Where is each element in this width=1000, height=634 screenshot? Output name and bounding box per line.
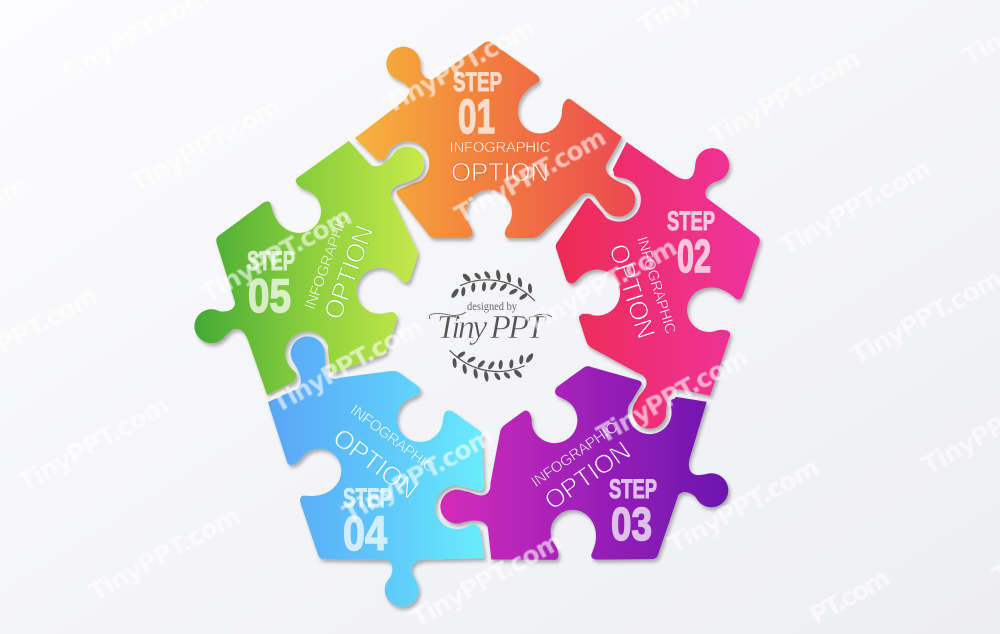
panel: step 01 puzzle piece (355, 42, 635, 238)
watermarks: TinyPPT.com (84, 500, 245, 607)
panel: step 02 puzzle piece (532, 112, 805, 440)
panel: step 04 puzzle piece (201, 312, 543, 634)
step 04 number: 04 (343, 508, 387, 561)
step 02 number: 02 (677, 230, 711, 282)
panel: step 05 puzzle piece (175, 99, 449, 426)
watermarks: TinyPPT.com (592, 342, 753, 449)
step 01 infographic caption: INFOGRAPHIC (450, 139, 551, 156)
step 02 option caption: OPTION (603, 240, 662, 342)
watermarks: TinyPPT.com (450, 122, 611, 229)
step 05 label: STEP (247, 246, 295, 276)
green piece shape (175, 99, 449, 426)
watermarks: PT.com (805, 563, 895, 630)
icon: bottom laurel (450, 350, 535, 382)
logo swash (429, 312, 552, 319)
watermarks: TinyPPT.com (267, 311, 428, 418)
step 03 number: 03 (611, 498, 652, 550)
step 03 infographic caption: INFOGRAPHIC (528, 419, 621, 491)
watermarks: TinyPPT.com (125, 91, 286, 198)
watermarks: TinyPPT.com (338, 421, 499, 528)
centre logo (429, 269, 552, 382)
watermarks: TinyPPT.com (406, 526, 567, 633)
watermarks: TinyPPT.com (663, 452, 824, 559)
watermarks: TinyPPT.com (704, 43, 865, 150)
purple piece shape (421, 321, 763, 634)
watermarks: TinyPPT.com (13, 390, 174, 497)
watermarks: TinyPPT.com (379, 12, 540, 119)
step 05 number: 05 (248, 269, 291, 322)
step 01 option caption: OPTION (451, 157, 549, 187)
step 02 infographic caption: INFOGRAPHIC (633, 235, 679, 336)
step 03 option caption: OPTION (539, 435, 636, 516)
step 01 label: STEP (453, 67, 502, 97)
logo wordmark: Tiny PPT (437, 309, 547, 346)
panel: step 03 puzzle piece (421, 321, 763, 634)
step 04 infographic caption: INFOGRAPHIC (347, 402, 438, 476)
step 01 number: 01 (458, 91, 495, 144)
blue piece shape (201, 312, 543, 634)
orange piece shape (355, 42, 635, 238)
watermarks: TinyPPT.com (196, 201, 357, 308)
pink piece shape (532, 112, 805, 440)
watermarks: TinyPPT.com (521, 232, 682, 339)
step 02 label: STEP (667, 206, 715, 236)
step 05 infographic caption: INFOGRAPHIC (302, 211, 352, 312)
icon: top laurel (450, 269, 535, 301)
step 03 label: STEP (609, 474, 657, 504)
watermarks: TinyPPT.com (775, 153, 936, 260)
step 05 option caption: OPTION (318, 221, 379, 323)
logo tagline: designed by (467, 299, 517, 313)
step 04 label: STEP (343, 483, 392, 513)
step 04 option caption: OPTION (328, 422, 424, 505)
